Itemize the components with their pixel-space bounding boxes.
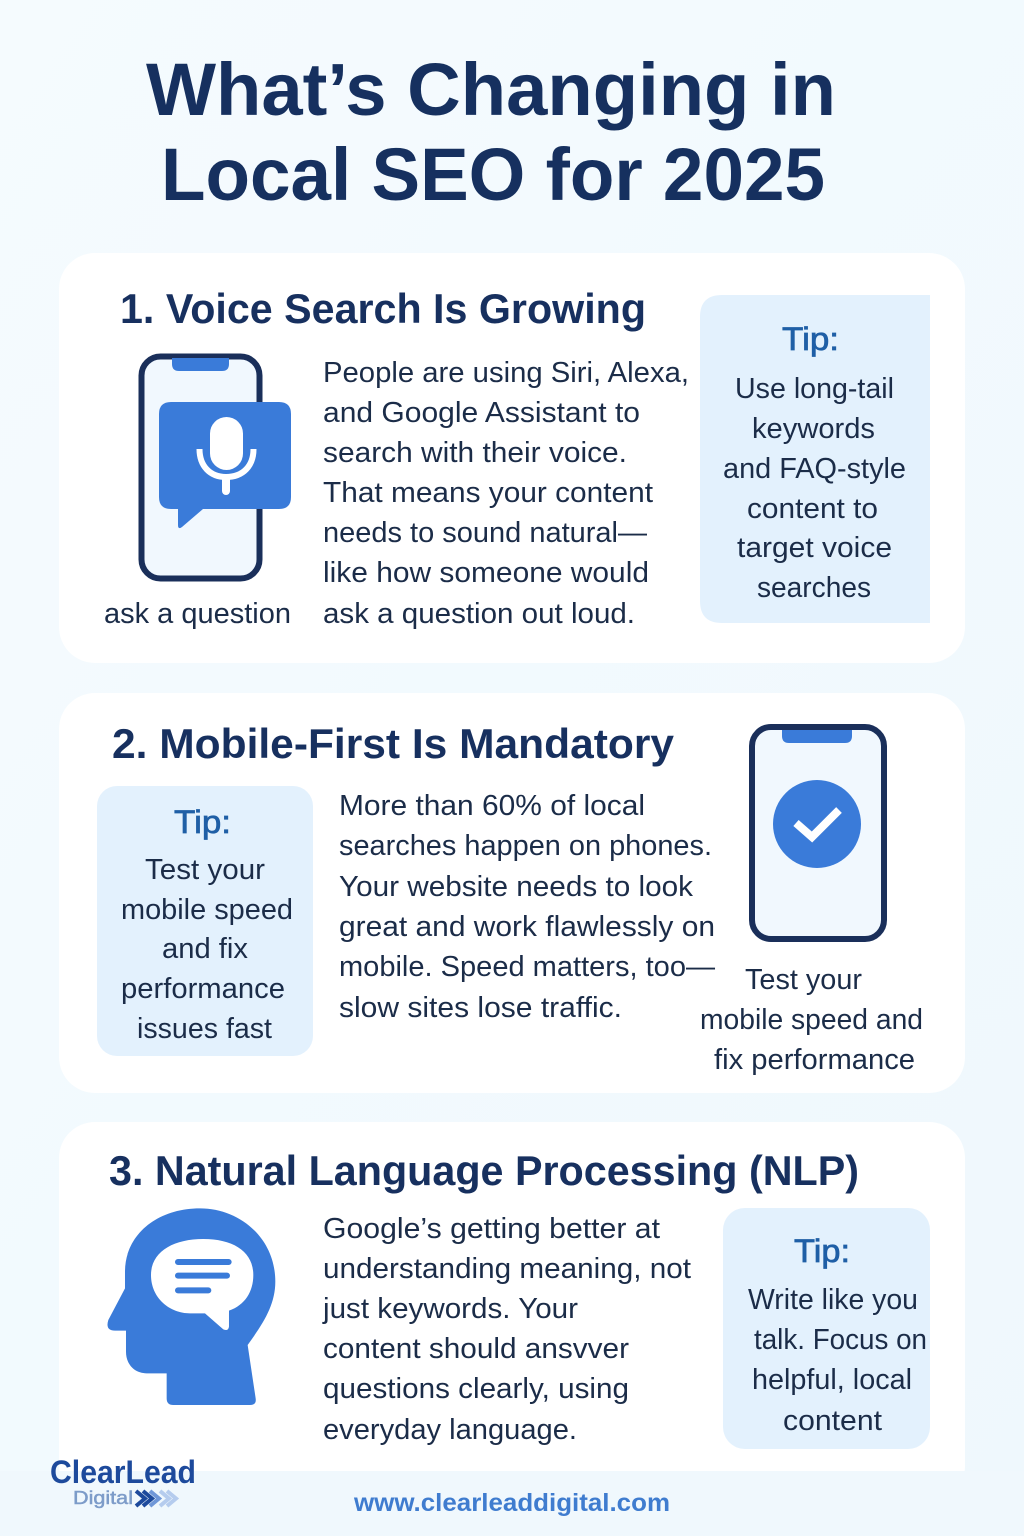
body text: That means your content bbox=[323, 477, 653, 509]
tip box: and fix bbox=[162, 933, 248, 965]
title: What’s Changing in bbox=[146, 48, 836, 131]
logo: Digital bbox=[73, 1488, 133, 1508]
tip box: searches bbox=[757, 572, 871, 604]
body text: slow sites lose traffic. bbox=[339, 992, 622, 1024]
tip box bbox=[723, 1208, 930, 1449]
body text: content should ansvver bbox=[323, 1333, 629, 1365]
body text: great and work flawlessly on bbox=[339, 911, 715, 943]
tip box: performance bbox=[121, 973, 285, 1005]
icon caption: fix performance bbox=[714, 1044, 915, 1076]
tip box: Tip: bbox=[794, 1233, 850, 1269]
body text: searches happen on phones. bbox=[339, 830, 712, 862]
body text: needs to sound natural— bbox=[323, 517, 647, 549]
tip box: keywords bbox=[752, 413, 875, 445]
logo: ClearLead bbox=[50, 1454, 196, 1490]
icon caption bbox=[700, 964, 923, 1076]
body text: everyday language. bbox=[323, 1414, 577, 1446]
body text: and Google Assistant to bbox=[323, 397, 640, 429]
icon caption: ask a question bbox=[104, 598, 291, 630]
icon: head with speech bubble bbox=[107, 1208, 275, 1405]
title: Local SEO for 2025 bbox=[161, 133, 825, 216]
body text: Google’s getting better at bbox=[323, 1213, 660, 1245]
tip box: content to bbox=[747, 493, 878, 525]
body text: understanding meaning, not bbox=[323, 1253, 691, 1285]
body text: People are using Siri, Alexa, bbox=[323, 357, 689, 389]
body text: More than 60% of local bbox=[339, 790, 645, 822]
body text: like how someone would bbox=[323, 557, 649, 589]
body text: Your website needs to look bbox=[339, 871, 693, 903]
tip box: helpful, local bbox=[752, 1364, 912, 1396]
body text: just keywords. Your bbox=[322, 1293, 578, 1325]
tip box: and FAQ-style bbox=[723, 453, 906, 485]
tip box: mobile speed bbox=[121, 894, 293, 926]
icon: phone with microphone bubble bbox=[142, 356, 291, 578]
tip box bbox=[97, 786, 313, 1056]
body text: mobile. Speed matters, too— bbox=[339, 951, 715, 983]
panel: natural language processing bbox=[59, 1122, 965, 1502]
tip box: Use long-tail bbox=[735, 373, 894, 405]
heading: voice search: 1. Voice Search Is Growing bbox=[120, 285, 646, 332]
panel: voice search bbox=[59, 253, 965, 663]
tip box: content bbox=[783, 1405, 882, 1437]
panel: mobile first bbox=[59, 693, 965, 1093]
tip box: Test your bbox=[145, 854, 265, 886]
body text: search with their voice. bbox=[323, 437, 627, 469]
body text: questions clearly, using bbox=[323, 1373, 629, 1405]
tip box: Write like you bbox=[748, 1284, 918, 1316]
tip box: issues fast bbox=[137, 1013, 272, 1045]
heading: NLP: 3. Natural Language Processing (NLP) bbox=[109, 1147, 859, 1194]
heading: mobile first: 2. Mobile-First Is Mandatory bbox=[112, 720, 675, 767]
icon caption: mobile speed and bbox=[700, 1004, 923, 1036]
tip box: target voice bbox=[737, 532, 892, 564]
icon: phone with check mark bbox=[752, 727, 884, 939]
tip box: Tip: bbox=[782, 321, 839, 357]
logo bbox=[50, 1454, 196, 1508]
body text bbox=[323, 357, 689, 630]
body text bbox=[322, 1213, 691, 1446]
footer band bbox=[0, 1454, 1024, 1536]
body text bbox=[339, 790, 715, 1024]
body text: ask a question out loud. bbox=[323, 598, 635, 630]
tip box bbox=[700, 295, 930, 623]
tip box: talk. Focus on bbox=[754, 1324, 927, 1356]
website url: www.clearleaddigital.com bbox=[353, 1489, 670, 1517]
tip box: Tip: bbox=[174, 804, 231, 840]
icon caption: Test your bbox=[745, 964, 862, 996]
title bbox=[146, 48, 836, 216]
